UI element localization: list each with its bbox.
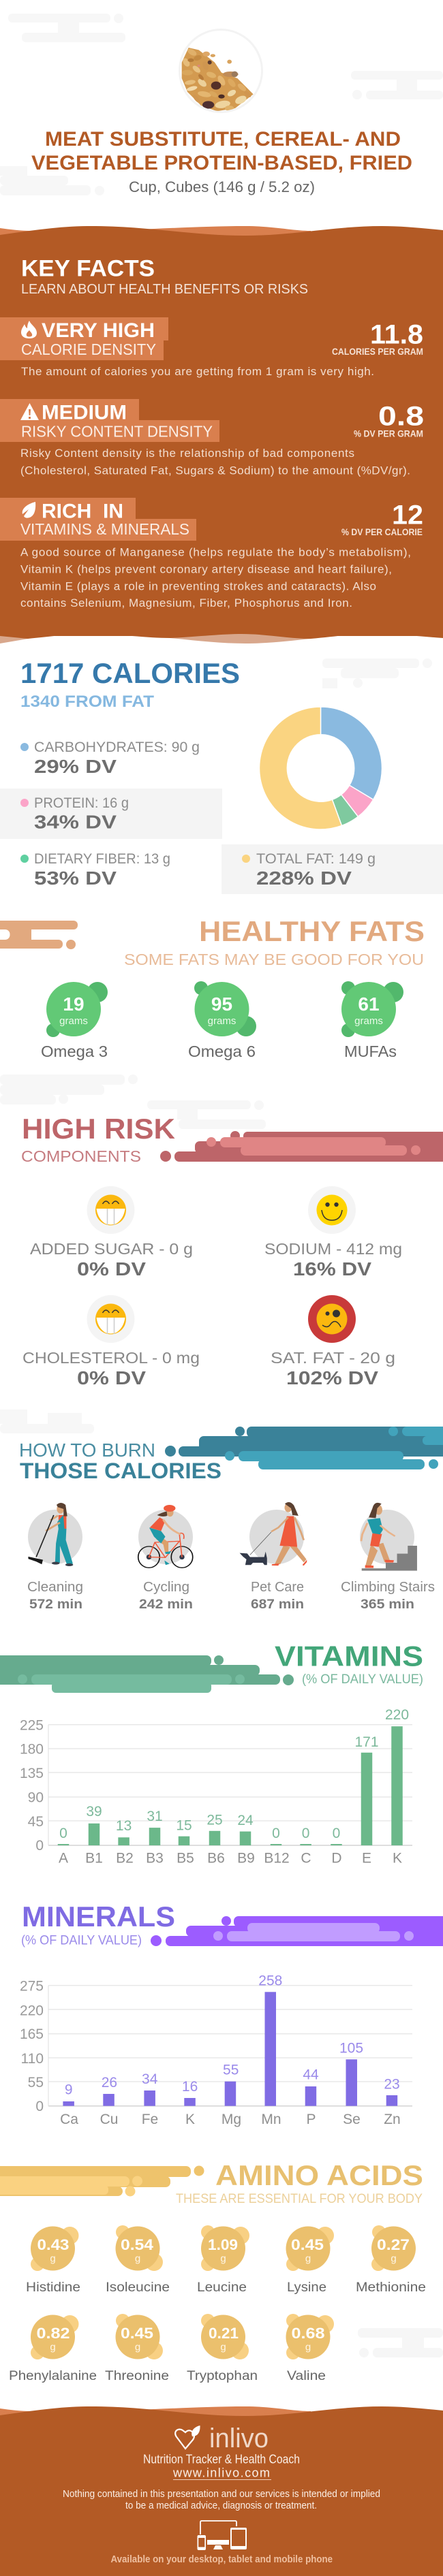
tryptophan [187,2314,258,2383]
background cloud [358,2328,443,2357]
bar chart: vitamins: 0 [302,1826,309,1841]
bar chart: minerals [20,1973,412,2127]
panel: high risk components [21,1113,443,1388]
rating: rich in: RICH IN [42,500,123,523]
bar chart: minerals: 16 [182,2079,198,2095]
title [31,128,412,174]
valine: g [305,2342,311,2353]
icon: grinning face [87,1186,135,1234]
legend: dietary fiber: DIETARY FIBER: 13 g [34,851,170,867]
subheading: 1340 FROM FAT [20,693,154,711]
bar chart: minerals: Mn [261,2112,281,2127]
valine: 0.68 [292,2325,324,2342]
activity: pet care [240,1502,307,1612]
tryptophan: 0.21 [209,2325,239,2342]
bar chart: minerals: 0 [35,2099,44,2114]
activity: pet care: Pet Care [251,1580,304,1595]
heading: HIGH RISK [22,1113,175,1145]
brand name: inlivo [209,2423,269,2453]
saturated fat: SAT. FAT - 20 g [271,1349,395,1367]
isoleucine [106,2225,170,2295]
website link: www.inlivo.com [172,2466,270,2480]
omega 6 badge [188,981,256,1060]
bar chart: minerals: 165 [20,2026,44,2042]
icon: leaf [22,502,35,518]
sodium [264,1186,402,1279]
vitamins and minerals row: VITAMINS & MINERALS [20,520,189,538]
tryptophan: g [220,2342,226,2353]
bar chart: minerals: 55 [223,2063,239,2078]
phenylalanine: g [50,2342,56,2353]
icon: warning triangle [20,403,39,420]
bar chart: vitamins: 0 [59,1826,67,1841]
icon: devices [198,2521,247,2550]
decorative band [0,921,78,949]
legend: protein: 34% DV [34,812,117,833]
bar chart: minerals: 44 [303,2067,319,2083]
omega 3 badge: Omega 3 [41,1043,108,1060]
subheading: (% OF DAILY VALUE) [21,1934,142,1948]
lysine: Lysine [287,2280,326,2295]
panel: how to burn those calories [19,1427,443,1612]
panel: amino acids [0,2159,443,2383]
donut chart [259,707,382,829]
bar chart: minerals: Mg [222,2112,241,2127]
heading: 1717 CALORIES [20,657,240,689]
background cloud right [351,71,443,99]
activity: cycling: Cycling [143,1580,189,1595]
bar chart: vitamins: A [59,1851,68,1866]
isoleucine: 0.54 [121,2236,154,2253]
bar chart: minerals: Se [343,2112,361,2127]
subheading: THESE ARE ESSENTIAL FOR YOUR BODY [176,2192,423,2206]
leucine: g [220,2253,226,2265]
background cloud [0,1410,94,1433]
bar chart: minerals: K [185,2112,195,2127]
serving size: Cup, Cubes (146 g / 5.2 oz) [129,178,315,195]
description: A good source of Manganese (helps regulate the body’s metabolism), [20,546,411,558]
icon: grinning face [87,1295,135,1343]
panel: minerals [20,1901,443,2127]
description [20,447,410,477]
vitamins and minerals row [0,498,423,609]
saturated fat: 102% DV [286,1367,378,1388]
cholesterol: 0% DV [77,1367,146,1388]
MUFAs badge: MUFAs [344,1043,397,1060]
decorative band [0,1655,294,1693]
omega 3 badge: 19 [63,993,85,1015]
methionine: g [391,2253,397,2265]
histidine [26,2227,80,2295]
bar chart: minerals: Ca [60,2112,78,2127]
subheading: LEARN ABOUT HEALTH BENEFITS OR RISKS [21,282,308,297]
leucine [197,2225,249,2295]
bar chart: vitamins: 225 [20,1718,44,1734]
bar chart: vitamins: B12 [264,1851,290,1866]
bar chart: vitamins: B2 [116,1851,134,1866]
bar chart: vitamins: 31 [147,1809,163,1824]
description: Vitamin K (helps prevent coronary artery disease and heart failure), [20,562,392,575]
icon: worried face [308,1295,356,1343]
disclaimer [63,2488,380,2511]
threonine: 0.45 [121,2325,153,2342]
activity: cleaning: Cleaning [27,1580,83,1595]
subheading: SOME FATS MAY BE GOOD FOR YOU [124,951,424,968]
bar chart: minerals: 220 [20,2003,44,2018]
omega 6 badge: grams [208,1015,236,1027]
bar chart: minerals: 110 [21,2051,44,2067]
bar chart: vitamins: 135 [20,1766,44,1781]
stat: 11.8 calories per gram: 11.8 [370,320,423,350]
bar chart: vitamins: B9 [237,1851,255,1866]
activity: cleaning: 572 min [29,1597,82,1612]
bar chart: vitamins: 0 [272,1826,280,1841]
cholesterol: CHOLESTEROL - 0 mg [22,1349,200,1367]
bar chart: vitamins: D [331,1851,342,1866]
subheading: (% OF DAILY VALUE) [302,1672,423,1687]
panel: vitamins [0,1640,423,1866]
sodium: 16% DV [293,1258,371,1279]
histidine: g [50,2253,56,2265]
legend: carbohydrates: CARBOHYDRATES: 90 g [34,740,200,755]
description: Vitamin E (plays a role in preventing strokes and cataracts). Also [20,579,376,592]
legend: total fat: TOTAL FAT: 149 g [256,851,376,867]
description: (Cholesterol, Saturated Fat, Sugars & Sodium) to the amount (%DV/gr). [20,464,410,477]
bar chart: minerals: 26 [102,2075,117,2090]
panel: healthy fats [0,915,425,1060]
valine: Valine [287,2369,326,2383]
heading: VITAMINS [275,1640,423,1672]
icon: flame [21,321,37,338]
leucine: Leucine [197,2280,247,2295]
legend: total fat [242,851,376,889]
lysine: 0.45 [291,2236,324,2253]
legend: carbohydrates [20,740,200,777]
decorative band [151,1916,443,1946]
phenylalanine [9,2315,97,2383]
activity: cycling [138,1505,193,1612]
phenylalanine: Phenylalanine [9,2369,97,2383]
isoleucine: Isoleucine [106,2280,170,2295]
stat: 0.8 percent DV per gram: 0.8 [378,402,424,432]
bar chart: minerals: Cu [100,2112,118,2127]
bar chart: vitamins: E [362,1851,371,1866]
bar chart: vitamins: 39 [86,1804,102,1819]
illustration: woman sweeping [28,1503,73,1566]
legend backgrounds [0,789,443,894]
bar chart: minerals: Zn [384,2112,401,2127]
bar chart: minerals: P [306,2112,316,2127]
legend: total fat: 228% DV [256,868,352,889]
disclaimer: to be a medical advice, diagnosis or treatment. [125,2500,317,2511]
logo: heart and leaf [175,2426,200,2449]
stat: 12 percent DV per calorie: 12 [392,500,423,530]
bar chart: vitamins: 15 [176,1818,192,1834]
added sugar: 0% DV [77,1258,146,1279]
decorative band [0,2165,204,2197]
title: VEGETABLE PROTEIN-BASED, FRIED [31,152,412,174]
illustration: woman walking a dog [240,1502,307,1565]
bar chart: vitamins: 24 [237,1813,254,1828]
bar chart: vitamins: B1 [85,1851,103,1866]
background cloud left [0,166,104,195]
valine [286,2314,334,2383]
bar chart: vitamins: 45 [28,1814,44,1830]
legend: carbohydrates: 29% DV [34,756,117,777]
bar chart: minerals: 9 [65,2082,73,2098]
bar chart: vitamins: 180 [20,1742,44,1758]
isoleucine: g [135,2253,140,2265]
bar chart: vitamins: B5 [177,1851,194,1866]
tagline: Nutrition Tracker & Health Coach [143,2453,300,2466]
bar chart: minerals: 258 [258,1973,282,1988]
omega 3 badge [41,982,108,1060]
saturated fat [271,1295,395,1388]
omega 6 badge: 95 [211,993,232,1015]
phenylalanine: 0.82 [37,2325,70,2342]
bar chart: vitamins: 90 [28,1790,44,1806]
bar chart: vitamins: B6 [207,1851,225,1866]
risky content density row [0,399,424,477]
availability note: Available on your desktop, tablet and mobile phone [110,2554,333,2565]
MUFAs badge: grams [354,1015,383,1027]
legend: dietary fiber [20,851,170,889]
heading: KEY FACTS [21,256,155,282]
heading: HEALTHY FATS [199,915,425,947]
heading line 2: THOSE CALORIES [20,1459,222,1483]
panel: key facts [0,226,443,643]
bar chart: vitamins: 25 [207,1812,223,1828]
panel: footer [0,2406,443,2576]
description: Risky Content density is the relationship of bad components [20,447,354,460]
MUFAs badge [341,981,403,1060]
legend: protein: PROTEIN: 16 g [34,795,129,811]
sodium: SODIUM - 412 mg [264,1240,402,1258]
histidine: Histidine [26,2280,80,2295]
activity: cleaning [27,1503,83,1612]
bar chart: vitamins: 0 [333,1826,340,1841]
bar chart: minerals: Fe [142,2112,158,2127]
bar chart: minerals: 55 [28,2075,44,2090]
icon: smiling face [308,1186,356,1234]
illustration: woman cycling [138,1505,193,1568]
subheading: COMPONENTS [21,1147,141,1165]
activity: cycling: 242 min [139,1597,193,1612]
leucine: 1.09 [208,2236,238,2253]
activity: climbing stairs [341,1503,435,1612]
activity: climbing stairs: Climbing Stairs [341,1580,435,1595]
description: contains Selenium, Magnesium, Fiber, Phosphorus and Iron. [20,597,352,609]
bar chart: minerals: 275 [20,1978,44,1994]
description: The amount of calories you are getting from 1 gram is very high. [21,365,374,378]
bar chart: minerals: 23 [384,2076,400,2092]
threonine: g [135,2342,140,2353]
decorative band [160,1131,443,1162]
methionine [356,2225,426,2295]
bar chart: vitamins: B3 [146,1851,164,1866]
background clouds between sections [0,1075,266,1129]
methionine: 0.27 [377,2236,410,2253]
panel: calories [0,657,443,894]
bar chart: vitamins: C [301,1851,311,1866]
background cloud top left [8,14,125,42]
MUFAs badge: 61 [358,993,380,1015]
bar chart: vitamins: 0 [35,1838,44,1854]
heading: MINERALS [22,1901,175,1933]
bar chart: vitamins: 13 [116,1818,132,1834]
food image: granola in a circle [180,30,262,112]
rating: very high: VERY HIGH [42,319,155,342]
heading line 1: HOW TO BURN [19,1440,155,1461]
bar chart: vitamins: K [393,1851,402,1866]
bar chart: vitamins: 171 [354,1734,379,1750]
histidine: 0.43 [37,2236,70,2253]
legend: protein [20,795,129,833]
bar chart: minerals: 34 [142,2071,158,2087]
lysine [286,2227,334,2295]
heading: AMINO ACIDS [215,2159,423,2191]
bar chart: minerals: 105 [339,2040,363,2056]
threonine [105,2314,169,2383]
threonine: Threonine [105,2369,169,2383]
calorie density row: CALORIES PER GRAM [332,346,423,357]
omega 3 badge: grams [59,1015,88,1027]
bar chart: vitamins [20,1707,412,1866]
rating: medium: MEDIUM [42,402,127,424]
header section [31,29,412,195]
description [20,546,411,609]
decorative band [165,1427,443,1469]
omega 6 badge: Omega 6 [188,1043,256,1060]
risky content density row: % DV PER GRAM [354,428,423,439]
background cloud [322,658,432,688]
tryptophan: Tryptophan [187,2369,258,2383]
risky content density row: RISKY CONTENT DENSITY [21,422,213,440]
vitamins and minerals row: % DV PER CALORIE [341,526,423,537]
activity: climbing stairs: 365 min [361,1597,414,1612]
bar chart: vitamins: 220 [385,1707,409,1723]
lysine: g [305,2253,311,2265]
cholesterol [22,1295,200,1388]
calorie density row [0,317,423,378]
disclaimer: Nothing contained in this presentation and our services is intended or implied [63,2488,380,2500]
legend: dietary fiber: 53% DV [34,868,117,889]
illustration: woman climbing stairs [361,1503,417,1571]
methionine: Methionine [356,2280,426,2295]
activity: pet care: 687 min [251,1597,304,1612]
added sugar: ADDED SUGAR - 0 g [30,1240,193,1258]
added sugar [30,1186,193,1279]
calorie density row: CALORIE DENSITY [21,340,156,358]
title: MEAT SUBSTITUTE, CEREAL- AND [45,128,401,150]
